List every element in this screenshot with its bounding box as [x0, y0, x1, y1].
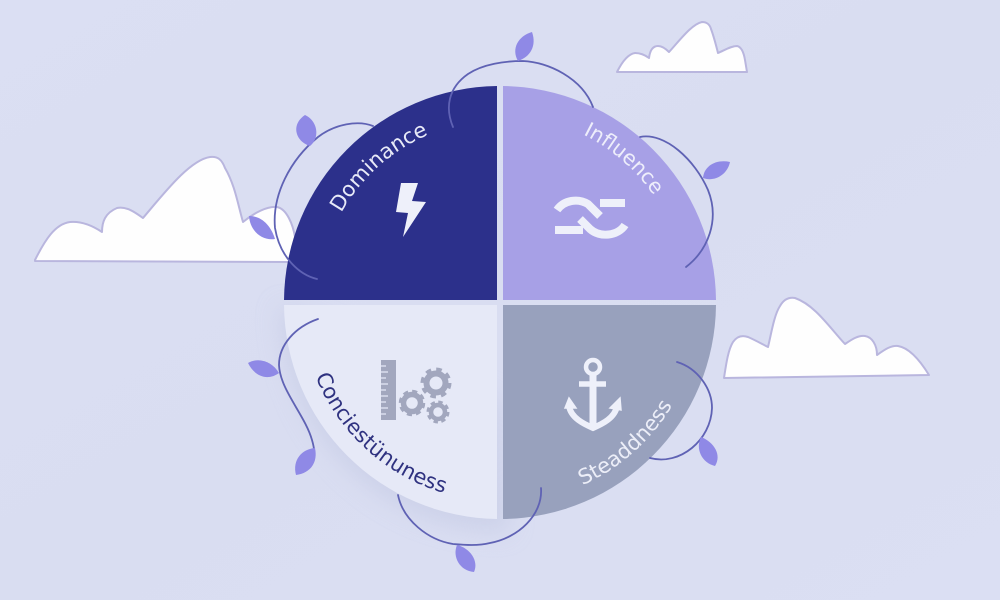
leaves [248, 32, 730, 572]
icon: lightning bolt [396, 183, 426, 237]
cloud: top right [617, 22, 747, 72]
vines [275, 61, 713, 545]
wheel shadow [280, 305, 510, 532]
label: Dominance: Dominance [329, 126, 427, 212]
icon: ruler and gears [381, 360, 450, 422]
label: Steaddness: Steaddness [578, 400, 671, 484]
panel: Dominance quadrant [284, 86, 497, 300]
label: Influence: Influence [584, 122, 660, 194]
panel: Steadiness quadrant [503, 305, 716, 519]
cloud: right [724, 298, 929, 378]
panel: Influence quadrant [503, 86, 716, 300]
gears [400, 370, 450, 422]
ruler [381, 360, 396, 420]
icon: anchor [565, 360, 621, 428]
icon: interlaced waves [555, 201, 625, 235]
label: Conciestunuess: Conciestünuness [318, 373, 446, 492]
panel: Conscientiousness quadrant [284, 305, 497, 519]
cloud: left [35, 157, 295, 262]
